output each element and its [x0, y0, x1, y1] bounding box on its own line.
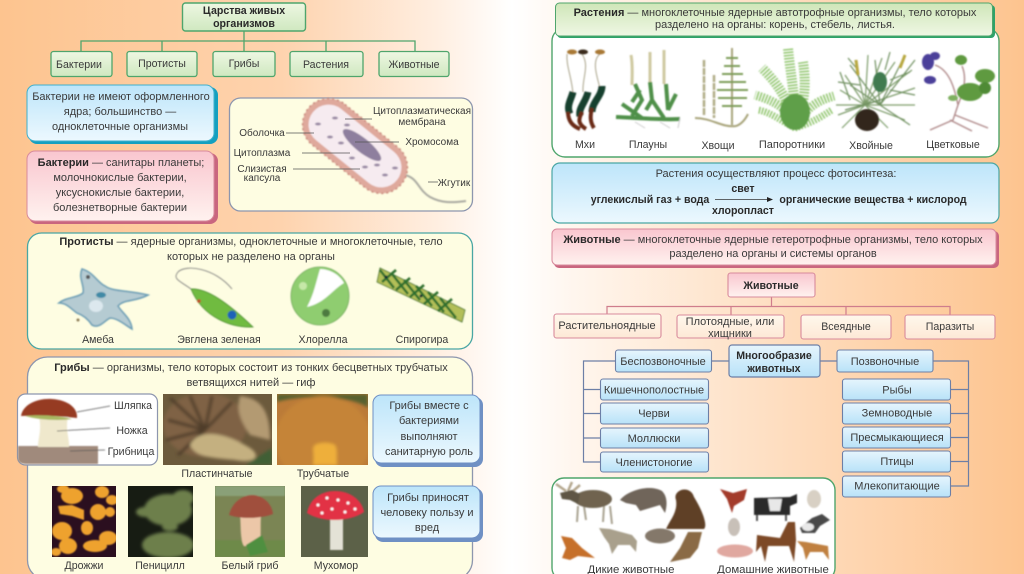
- panel: protists: Протисты — ядерные организмы, одноклеточные и многоклеточные, тело: [59, 236, 443, 248]
- panel: plants: Цветковые: [926, 139, 980, 151]
- kingdom: bacteria: Бактерии: [56, 59, 102, 71]
- icon: violet plant: [922, 52, 995, 131]
- kingdom: animals: Животные: [388, 59, 440, 71]
- callout: bacteria have no nucleus: Бактерии не имеют оформленного: [32, 91, 210, 103]
- panel: plants: Плауны: [629, 139, 667, 151]
- kingdom: plants: [290, 52, 363, 76]
- list: invertebrate groups: Черви: [638, 408, 670, 420]
- icon: pig: [717, 544, 753, 558]
- icon: horse: [756, 522, 796, 562]
- icon: bear: [666, 490, 705, 529]
- callout: animals definition: разделено на органы и системы органов: [669, 248, 877, 260]
- kingdom: plants: Растения: [303, 59, 349, 71]
- box: omnivores: [801, 315, 891, 339]
- callout: fungi sanitation role: выполняют: [400, 431, 458, 443]
- panel: plants: [552, 3, 999, 157]
- panel: protists: Спирогира: [396, 334, 448, 346]
- title: kingdoms: Царства живых: [203, 5, 285, 17]
- panel: plants: Мхи: [575, 139, 595, 151]
- kingdom: protists: [127, 52, 197, 76]
- heading: plants definition: разделено на органы: корень, стебель, листья.: [655, 19, 895, 31]
- kingdom: protists: Протисты: [138, 58, 186, 70]
- panel: plants: Папоротники: [759, 139, 825, 151]
- icon: hen: [720, 489, 747, 513]
- list: vertebrate groups: Рыбы: [882, 384, 912, 396]
- icon: mushroom diagram: Шляпка: [114, 400, 152, 412]
- icon: wolf: [599, 528, 637, 554]
- panel: protists: Эвглена зеленая: [177, 334, 261, 346]
- box: vertebrates: Позвоночные: [851, 356, 919, 368]
- box: herbivores: Растительноядные: [558, 320, 656, 332]
- icon: horsetails: [695, 48, 748, 126]
- panel: bacterium structure: [230, 88, 472, 211]
- box: carnivores: Плотоядные, или: [686, 316, 774, 328]
- photo: yeast: [51, 485, 118, 557]
- icon: bacterium cell: [292, 88, 466, 204]
- box: vertebrates: [837, 350, 933, 372]
- panel: protists: которых не разделено на органы: [167, 251, 335, 263]
- heading: diversity of animals: [729, 345, 820, 377]
- diagram: animal feeding types: [554, 273, 995, 340]
- title: kingdoms: организмов: [213, 18, 275, 30]
- list: vertebrate groups: Земноводные: [862, 408, 932, 420]
- panel: photosynthesis: углекислый газ + вода: [591, 194, 709, 206]
- icon: mushroom diagram: [18, 394, 158, 465]
- list: vertebrate groups: Птицы: [880, 456, 914, 468]
- callout: fungi benefit and harm: Грибы приносят: [387, 492, 469, 504]
- box: invertebrates: Беспозвоночные: [620, 356, 706, 368]
- icon: mushroom diagram: Грибница: [108, 446, 154, 458]
- photo: gilled mushroom: [163, 393, 272, 465]
- panel: fungi: ветвящихся нитей — гиф: [186, 377, 316, 389]
- panel: bacterium structure: мембрана: [398, 116, 446, 128]
- panel: fungi: Дрожжи: [65, 560, 104, 572]
- panel: wild and domestic animals: [552, 478, 835, 574]
- box: carnivores: хищники: [708, 328, 752, 340]
- list: vertebrate groups: Млекопитающие: [854, 480, 940, 492]
- list: invertebrate groups: Членистоногие: [615, 457, 693, 469]
- panel: bacterium structure: капсула: [244, 173, 281, 184]
- panel: fungi: Белый гриб: [222, 560, 278, 572]
- callout: animals definition: Животные — многоклеточные ядерные гетеротрофные организмы, тело которых: [562, 234, 983, 246]
- icon: hedgehog: [645, 528, 675, 544]
- kingdom: animals: [379, 52, 449, 76]
- callout: fungi benefit and harm: [373, 486, 483, 542]
- panel: bacterium structure: Хромосома: [405, 137, 459, 148]
- callout: bacteria are sanitation agents: молочнокислые бактерии,: [53, 172, 187, 184]
- icon: amoeba: [59, 269, 148, 329]
- callout: fungi sanitation role: Грибы вместе с: [389, 400, 469, 412]
- box: carnivores: [677, 315, 784, 340]
- panel: fungi: Пластинчатые: [181, 468, 253, 480]
- box: parasites: Паразиты: [926, 321, 974, 333]
- panel: bacterium structure: Жгутик: [438, 178, 471, 189]
- callout: fungi benefit and harm: вред: [415, 522, 440, 534]
- icon: mushroom diagram: Ножка: [116, 425, 148, 437]
- kingdom: fungi: Грибы: [229, 58, 259, 70]
- callout: bacteria are sanitation agents: [27, 151, 218, 224]
- icon: boar: [620, 488, 667, 513]
- panel: photosynthesis: [552, 163, 999, 223]
- callout: fungi sanitation role: [373, 395, 483, 467]
- box: parasites: [905, 315, 995, 339]
- callout: bacteria have no nucleus: [27, 85, 218, 144]
- list: invertebrate groups: [600, 379, 708, 472]
- icon: spirogyra: [377, 268, 465, 322]
- icon: conifer: [836, 52, 915, 131]
- callout: bacteria have no nucleus: одноклеточные организмы: [52, 121, 188, 133]
- icon: mosses: [567, 50, 605, 129]
- diagram: kingdoms of living organisms: [51, 3, 449, 76]
- callout: animals definition: [552, 229, 999, 268]
- icon: owl: [670, 532, 702, 562]
- panel: photosynthesis: хлоропласт: [712, 205, 774, 217]
- panel: plants: Хвойные: [849, 140, 893, 152]
- list: vertebrate groups: Пресмыкающиеся: [850, 432, 944, 444]
- list: invertebrate groups: Кишечнополостные: [604, 384, 704, 396]
- panel: bacterium structure: Цитоплазма: [234, 148, 291, 159]
- photo: penicillium: [128, 486, 194, 558]
- icon: rabbit: [728, 518, 740, 536]
- icon: calf: [800, 514, 830, 533]
- icon: dog: [797, 541, 829, 560]
- callout: fungi sanitation role: санитарную роль: [385, 446, 473, 458]
- callout: fungi sanitation role: бактериями: [399, 415, 459, 427]
- icon: fox: [561, 536, 595, 560]
- panel: bacterium structure: Оболочка: [239, 127, 285, 139]
- icon: clubmosses: [616, 50, 680, 128]
- callout: fungi benefit and harm: человеку пользу и: [380, 507, 474, 519]
- panel: fungi: Грибы — организмы, тело которых состоит из тонких бесцветных трубчатых: [54, 362, 448, 374]
- callout: bacteria are sanitation agents: Бактерии — санитары планеты;: [38, 157, 204, 169]
- kingdom: bacteria: [51, 52, 112, 76]
- heading: plants definition: Растения — многоклеточные ядерные автотрофные организмы, тело которых: [574, 7, 977, 19]
- panel: fungi: Пеницилл: [135, 560, 185, 572]
- icon: fern: [755, 48, 834, 130]
- heading: diversity of animals: животных: [746, 363, 801, 375]
- panel: photosynthesis: свет: [731, 183, 755, 195]
- panel: protists: Амеба: [82, 334, 114, 346]
- heading: animals: Животные: [742, 280, 799, 292]
- panel: fungi: Мухомор: [314, 560, 358, 572]
- heading: plants definition: [556, 3, 995, 38]
- box: invertebrates: [616, 350, 712, 372]
- heading: diversity of animals: Многообразие: [736, 350, 812, 362]
- box: omnivores: Всеядные: [821, 321, 871, 333]
- photo: tubular mushroom: [277, 394, 368, 465]
- icon: chlorella: [291, 267, 349, 325]
- callout: bacteria have no nucleus: ядра; большинство —: [64, 106, 176, 118]
- photo: fly agaric: [301, 486, 368, 557]
- panel: bacterium structure: Слизистая: [237, 164, 287, 175]
- icon: euglena: [176, 268, 253, 327]
- diagram: animal diversity: [584, 345, 968, 497]
- callout: bacteria are sanitation agents: уксуснокислые бактерии,: [56, 187, 184, 199]
- panel: fungi: Трубчатые: [297, 468, 349, 480]
- icon: cow: [754, 494, 797, 521]
- panel: bacterium structure: Цитоплазматическая: [373, 106, 471, 117]
- panel: plants: Хвощи: [701, 140, 735, 152]
- panel: photosynthesis: органические вещества + кислород: [779, 194, 967, 206]
- heading: animals: [728, 273, 815, 297]
- title: kingdoms: [182, 3, 306, 31]
- panel: photosynthesis: Растения осуществляют процесс фотосинтеза:: [656, 168, 896, 180]
- icon: moose: [556, 482, 612, 524]
- panel: protists: Хлорелла: [299, 334, 348, 346]
- box: herbivores: [554, 314, 661, 338]
- panel: protists: [28, 233, 472, 349]
- photo: porcini mushroom: [215, 486, 285, 557]
- panel: fungi: [18, 357, 483, 574]
- callout: bacteria are sanitation agents: болезнетворные бактерии: [53, 202, 187, 214]
- list: invertebrate groups: Моллюски: [628, 433, 680, 445]
- kingdom: fungi: [213, 52, 275, 76]
- arrow: reaction: [715, 197, 773, 202]
- list: vertebrate groups: [842, 379, 950, 497]
- icon: goat: [807, 490, 821, 508]
